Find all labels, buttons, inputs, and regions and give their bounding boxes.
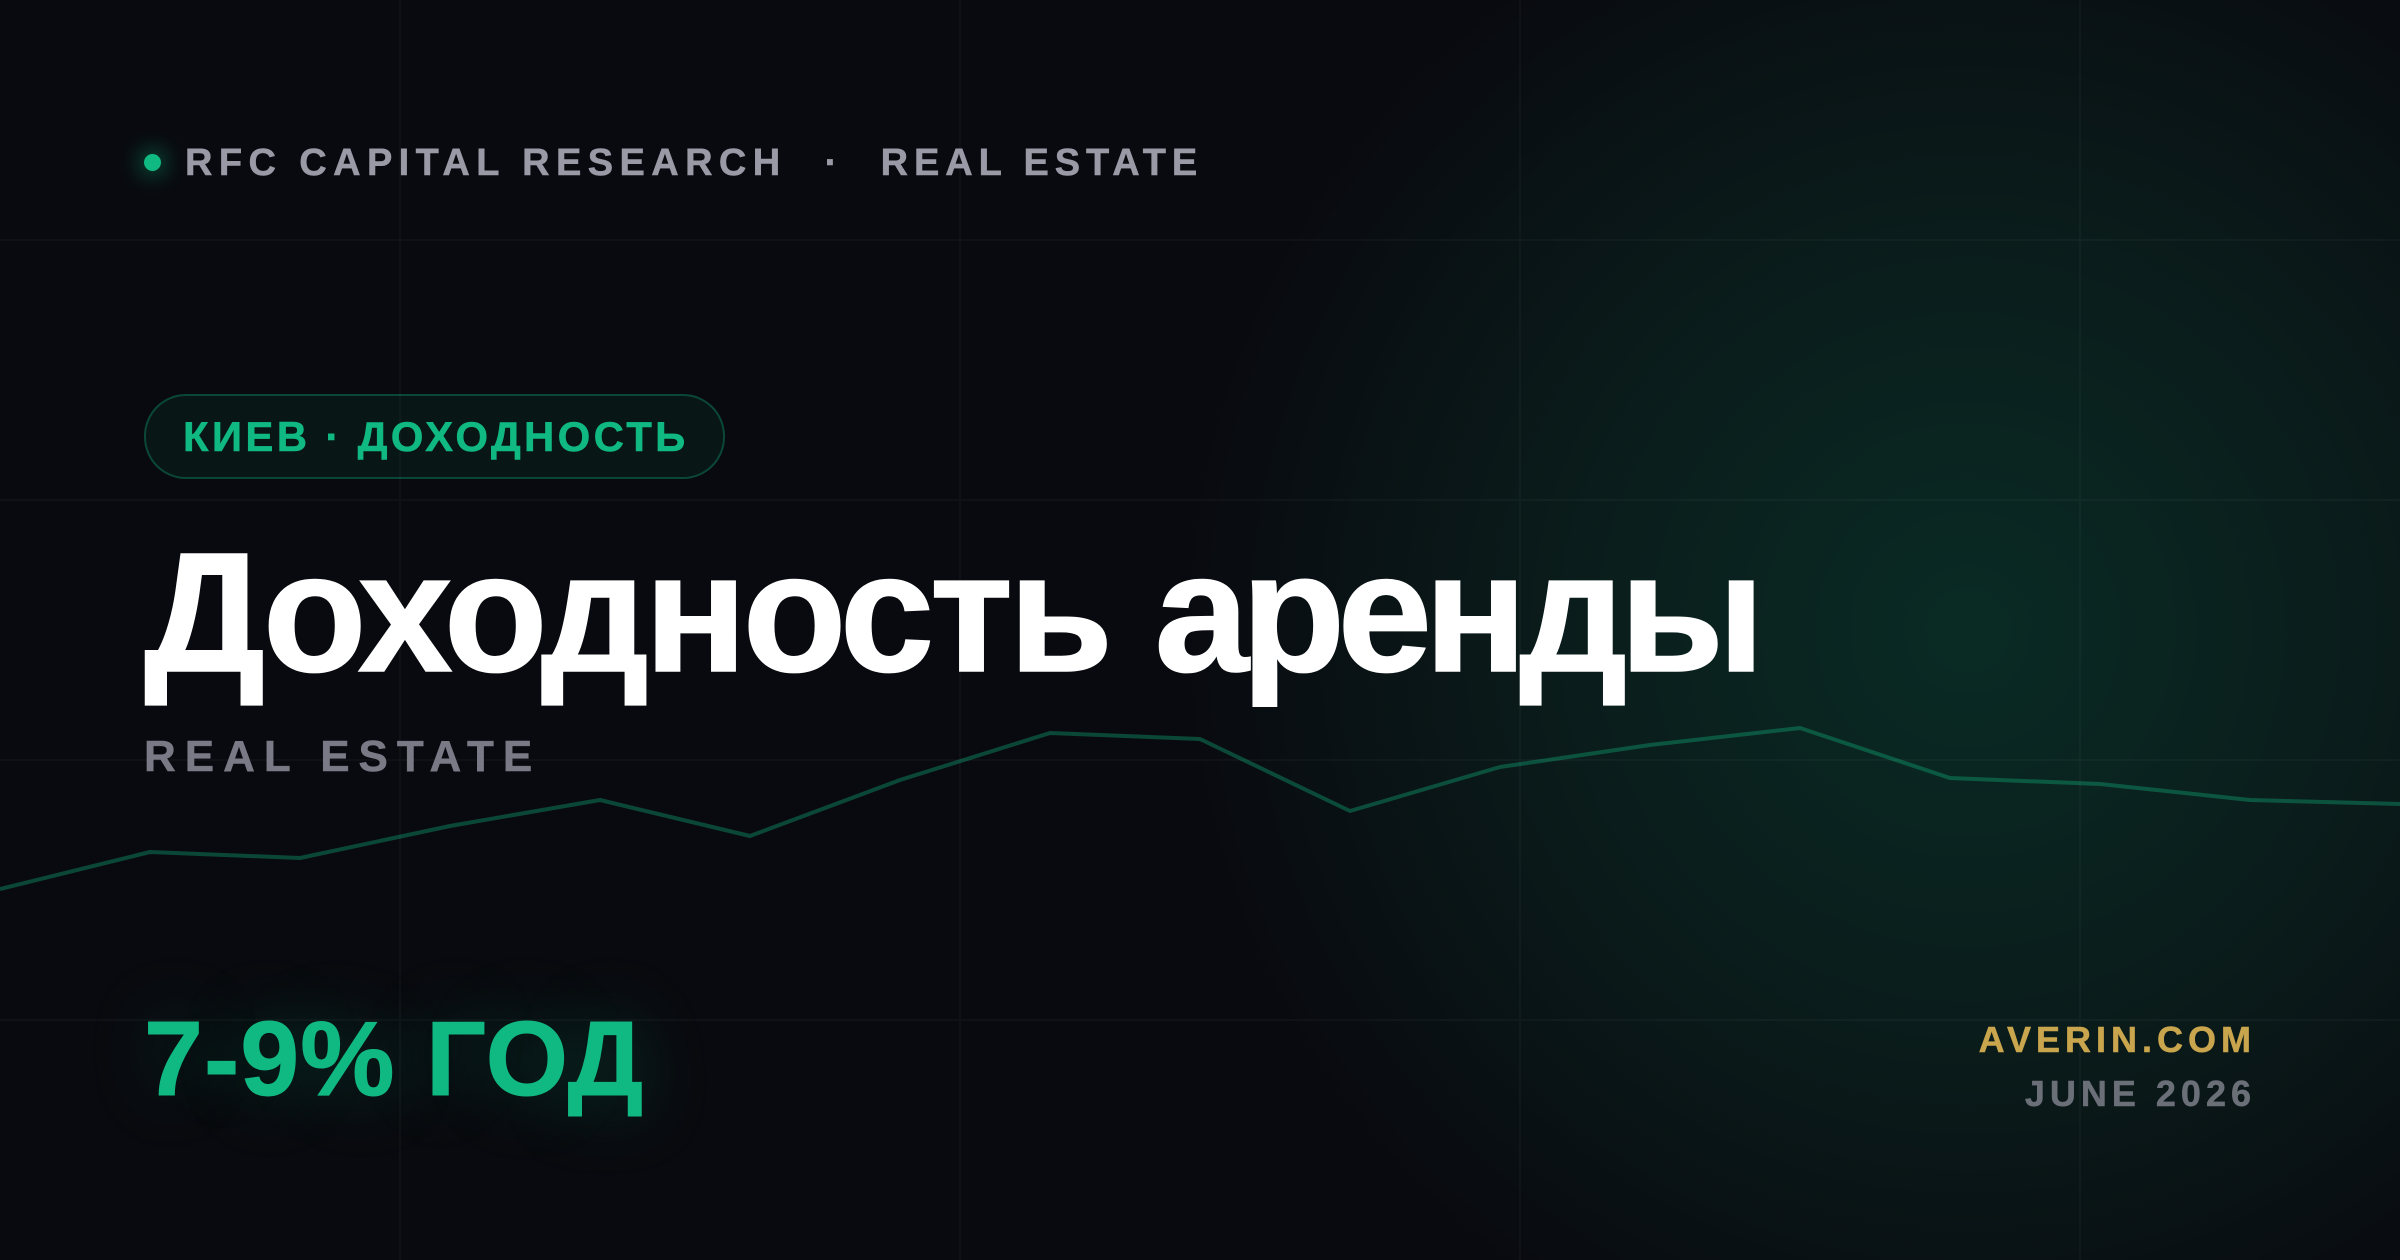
metric: 7-9% ГОД [144, 1000, 644, 1118]
title: Доходность аренды [144, 518, 1757, 708]
site name: AVERIN.COM [1979, 1019, 2256, 1060]
eyebrow text: RFC CAPITAL RESEARCH · REAL ESTATE [185, 142, 1203, 184]
pill text: КИЕВ · ДОХОДНОСТЬ [183, 413, 689, 460]
status dot [144, 154, 161, 171]
subtitle: REAL ESTATE [144, 732, 541, 781]
pill tag [144, 394, 725, 479]
date: JUNE 2026 [2025, 1073, 2256, 1114]
header eyebrow [130, 140, 1203, 184]
chart line [0, 728, 2400, 889]
